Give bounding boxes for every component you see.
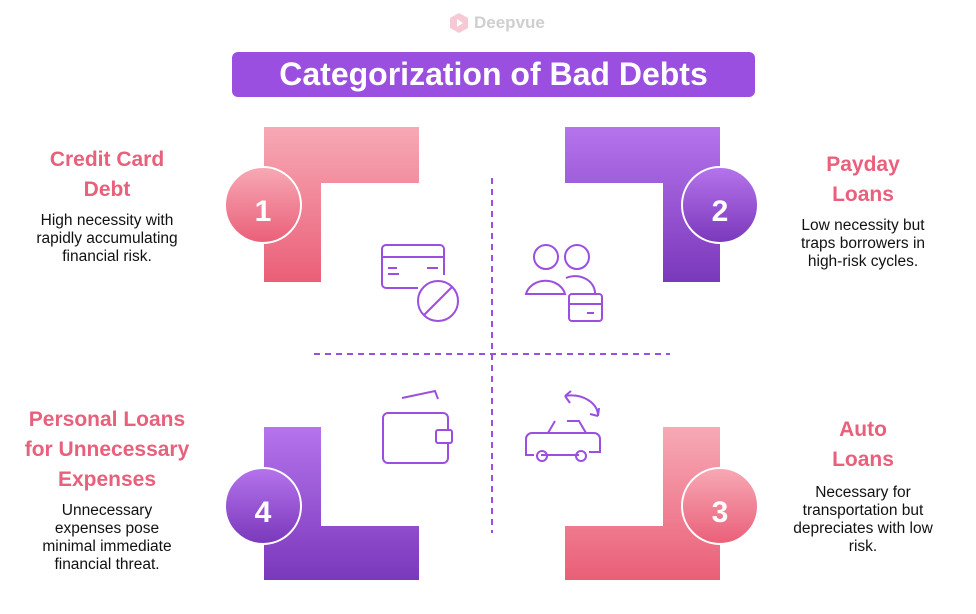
icon: people with card bbox=[526, 245, 602, 321]
L-shape 4: 4 bbox=[255, 496, 272, 529]
text: personal loans: Personal Loans bbox=[29, 408, 185, 431]
text: credit card debt: Credit Card bbox=[50, 148, 164, 171]
text: payday loans bbox=[801, 153, 925, 270]
text: payday loans: Loans bbox=[832, 183, 894, 206]
text: personal loans bbox=[25, 408, 190, 573]
text: credit card debt: financial risk. bbox=[62, 248, 152, 265]
L-shape 1 bbox=[225, 127, 419, 282]
text: personal loans: for Unnecessary bbox=[25, 438, 189, 461]
icon: credit card blocked bbox=[382, 245, 458, 321]
text: payday loans: traps borrowers in bbox=[801, 235, 925, 252]
text: credit card debt: rapidly accumulating bbox=[36, 230, 178, 247]
text: auto loans: transportation but bbox=[803, 502, 923, 519]
text: personal loans: expenses pose bbox=[55, 520, 159, 537]
text: credit card debt: High necessity with bbox=[41, 212, 173, 229]
icon: car with arrow bbox=[526, 391, 600, 461]
L-shape 3 bbox=[565, 427, 758, 580]
text: auto loans bbox=[793, 418, 933, 555]
L-shape 4 bbox=[225, 427, 419, 580]
text: payday loans: high-risk cycles. bbox=[808, 253, 918, 270]
title bbox=[232, 52, 755, 97]
text: personal loans: Expenses bbox=[58, 468, 156, 491]
text: personal loans: financial threat. bbox=[54, 556, 160, 573]
text: personal loans: Unnecessary bbox=[62, 502, 152, 519]
text: auto loans: depreciates with low bbox=[793, 520, 933, 537]
L-shape 1: 1 bbox=[255, 195, 271, 228]
L-shape 2 bbox=[565, 127, 758, 282]
text: auto loans: Auto bbox=[839, 418, 887, 441]
text: auto loans: risk. bbox=[849, 538, 877, 555]
text: payday loans: Low necessity but bbox=[801, 217, 925, 234]
title: Categorization of Bad Debts bbox=[279, 56, 708, 92]
L-shape 2: 2 bbox=[712, 195, 728, 228]
text: payday loans: Payday bbox=[826, 153, 900, 176]
text: auto loans: Necessary for bbox=[815, 484, 911, 501]
text: credit card debt: Debt bbox=[84, 178, 130, 201]
L-shape 3: 3 bbox=[712, 496, 728, 529]
logo: Deepvue bbox=[474, 13, 545, 32]
text: personal loans: minimal immediate bbox=[42, 538, 172, 555]
text: auto loans: Loans bbox=[832, 448, 894, 471]
icon: wallet bbox=[383, 391, 452, 463]
text: credit card debt bbox=[36, 148, 178, 265]
